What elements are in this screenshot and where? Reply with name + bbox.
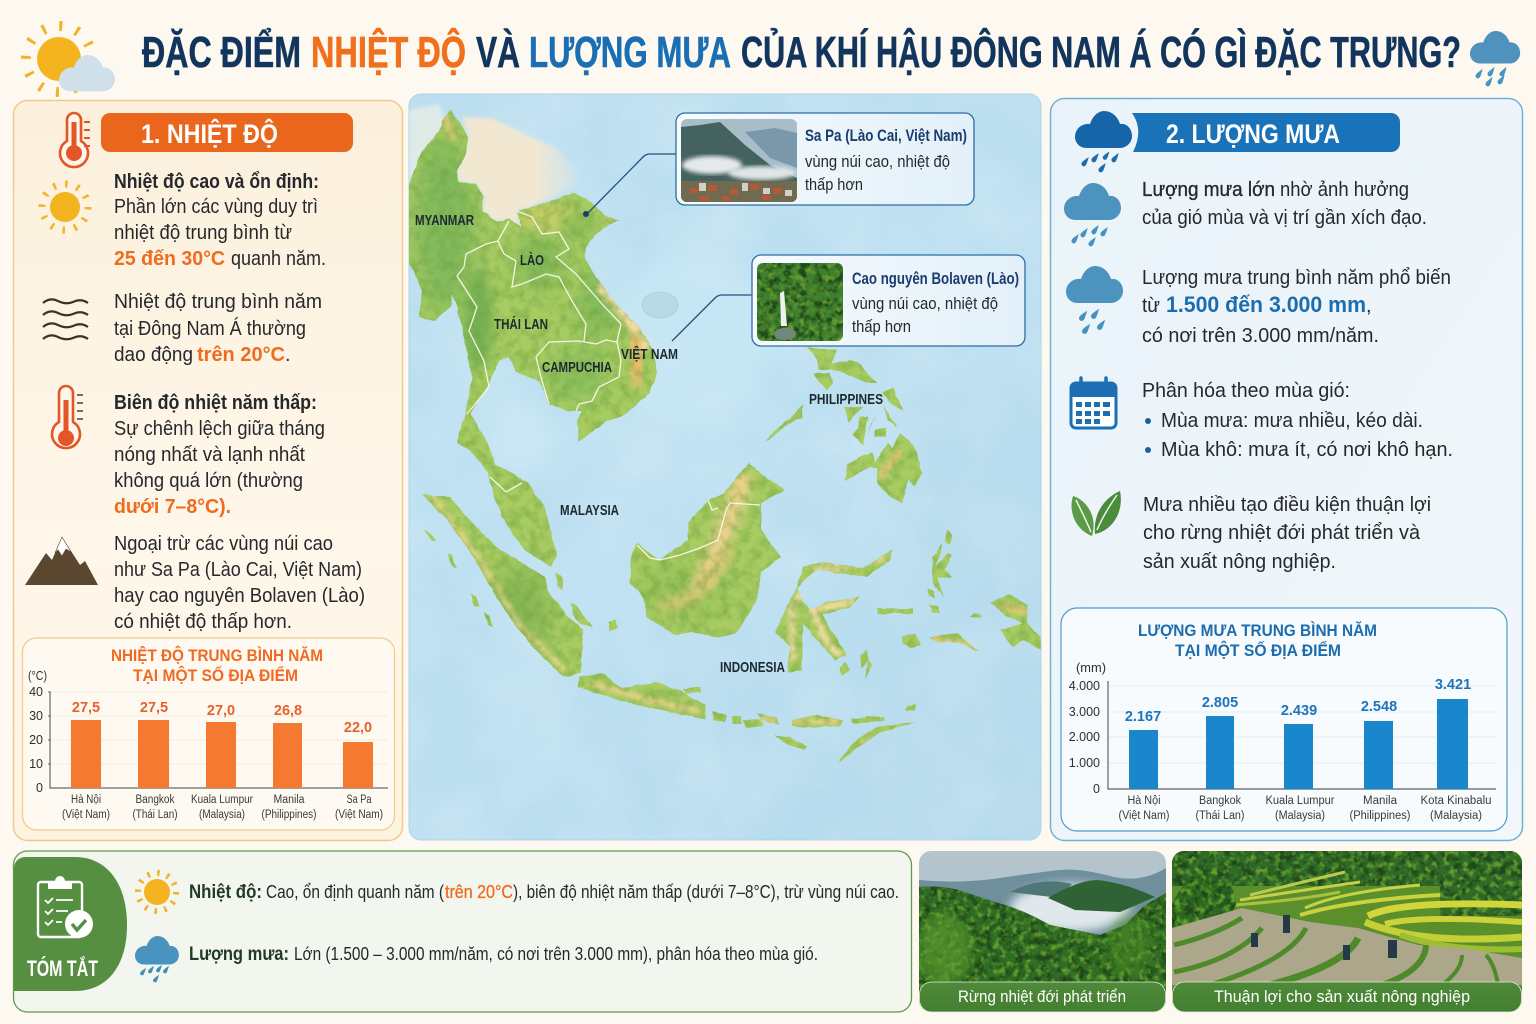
heading: 1. Nhiệt độ (101, 113, 353, 152)
text: high stable temperature (114, 171, 326, 270)
bar chart: temperature: (Malaysia) (199, 809, 245, 821)
bar chart: temperature (22, 638, 394, 830)
text: exception highlands: có nhiệt độ thấp hơn. (114, 611, 292, 633)
text: forests and agriculture: cho rừng nhiệt đới phát triển và (1143, 522, 1421, 544)
text: summary rainfall: Lượng mưa: (189, 944, 289, 965)
bar chart: rainfall: 2.548 (1361, 699, 1397, 715)
text: seasonal differentiation: Mùa mưa: mưa nhiều, kéo dài. (1161, 410, 1423, 432)
text: average temperature: trên 20°C (197, 344, 285, 366)
bar chart: temperature: 40 (29, 685, 43, 699)
text: annual rainfall (1142, 267, 1451, 347)
icon: rain cloud one (1064, 183, 1121, 247)
bar chart: temperature: (Thái Lan) (132, 809, 178, 821)
icon: calendar (1071, 378, 1116, 428)
photo: rice terraces (1172, 851, 1522, 1012)
text: exception highlands: hay cao nguyên Bolaven (Lào) (114, 585, 365, 607)
bar chart: temperature: Sa Pa (346, 794, 372, 806)
map: Hainan (642, 292, 678, 318)
text: forests and agriculture (1143, 494, 1431, 573)
heading: 2. Lượng mưa: 2. LƯỢNG MƯA (1166, 119, 1340, 149)
bar chart: rainfall: Kota Kinabalu (1420, 795, 1492, 807)
bar chart: temperature: 27,5 (72, 700, 100, 716)
text: heavy rain: nhờ ảnh hưởng (1280, 179, 1409, 201)
bar chart: temperature: TẠI MỘT SỐ ĐỊA ĐIỂM (133, 665, 298, 685)
text: exception highlands: Ngoại trừ các vùng núi cao (114, 533, 333, 555)
panel: rainfall (1050, 98, 1522, 840)
title (142, 26, 1461, 77)
heading: 2. Lượng mưa (1132, 113, 1400, 152)
text: annual rainfall: 1.500 đến 3.000 mm (1166, 292, 1366, 317)
bar chart: temperature: Bangkok (136, 794, 175, 806)
bar chart: temperature: Kuala Lumpur (191, 794, 253, 806)
icon: rain cloud top right (1470, 31, 1520, 87)
map: country labels: LÀO (520, 252, 544, 269)
map: country labels: CAMPUCHIA (542, 359, 612, 376)
text: summary rainfall: Lớn (1.500 – 3.000 mm/năm, có nơi trên 3.000 mm), phân hóa theo mùa gió. (294, 944, 818, 964)
caption: forest (920, 982, 1166, 1012)
text: low annual range (114, 392, 325, 518)
arrow: leader to Sa Pa (583, 154, 676, 217)
title: ĐẶC ĐIỂM (142, 26, 301, 77)
bar chart: rainfall: LƯỢNG MƯA TRUNG BÌNH NĂM (1138, 621, 1377, 640)
text: high stable temperature: nhiệt độ trung bình từ (114, 222, 292, 244)
bar chart: temperature: Hà Nội (71, 794, 101, 806)
text: low annual range: không quá lớn (thường (114, 470, 303, 492)
text: low annual range: nóng nhất và lạnh nhất (114, 444, 305, 466)
map: country labels (415, 212, 883, 676)
bar chart: temperature: (°C) (28, 669, 47, 683)
icon: checklist clipboard (38, 876, 93, 938)
icon: summary rain cloud (135, 936, 179, 983)
text: annual rainfall: , (1366, 295, 1372, 317)
bar chart: rainfall: 0 (1093, 782, 1100, 796)
bar chart: temperature: 26,8 (274, 703, 302, 719)
text: average temperature: Nhiệt độ trung bình năm (114, 291, 322, 313)
text: low annual range: dưới 7–8°C). (114, 496, 231, 518)
caption: agriculture (1172, 982, 1522, 1012)
text: average temperature (114, 291, 322, 366)
bar chart: temperature: Manila (274, 794, 305, 806)
text: Sa Pa note: thấp hơn (805, 175, 863, 194)
heading: 1. Nhiệt độ: 1. NHIỆT ĐỘ (141, 118, 278, 149)
text: average temperature: dao động (114, 344, 193, 366)
text: seasonal differentiation: Mùa khô: mưa ít, có nơi khô hạn. (1161, 439, 1453, 461)
bar chart: rainfall: (Malaysia) (1275, 810, 1325, 822)
bar chart: rainfall: 2.805 (1202, 695, 1238, 711)
text: annual rainfall: Lượng mưa trung bình năm phổ biến (1142, 267, 1451, 289)
caption: forest: Rừng nhiệt đới phát triển (958, 987, 1126, 1006)
arrow: leader to Bolaven (672, 295, 752, 341)
text: high stable temperature: 25 đến 30°C (114, 248, 225, 270)
bar chart: temperature: 10 (29, 757, 43, 771)
text: Bolaven note: vùng núi cao, nhiệt độ (852, 294, 998, 313)
text: annual rainfall: có nơi trên 3.000 mm/năm. (1142, 325, 1379, 347)
bar chart: temperature: (Việt Nam) (335, 809, 383, 821)
map: country labels: PHILIPPINES (809, 391, 883, 408)
icon: heat waves (43, 299, 88, 339)
text: low annual range: Biên độ nhiệt năm thấp: (114, 392, 317, 414)
icon: summary sun (138, 873, 176, 911)
bar chart: rainfall: 2.439 (1281, 703, 1317, 719)
bar chart: rainfall: (mm) (1076, 661, 1106, 675)
text: Bolaven note: thấp hơn (852, 317, 911, 336)
bar chart: rainfall: (Malaysia) (1430, 810, 1482, 822)
icon: sun (42, 184, 88, 230)
text: seasonal differentiation (1142, 380, 1453, 461)
bar chart: temperature: NHIỆT ĐỘ TRUNG BÌNH NĂM (111, 646, 323, 665)
icon: thermometer header (60, 113, 90, 167)
title: NHIỆT ĐỘ (311, 26, 466, 77)
icon: leaves (1072, 491, 1121, 536)
panel: temperature (14, 100, 402, 840)
map: China cream land (409, 104, 585, 227)
text: average temperature: . (285, 344, 291, 366)
text: exception highlands (114, 533, 365, 633)
map: country labels: MYANMAR (415, 212, 474, 229)
text: heavy rain: Lượng mưa lớn (1142, 179, 1275, 201)
photo: tropical forest (919, 851, 1166, 1012)
bar chart: rainfall: 3.421 (1435, 677, 1471, 693)
text: summary temperature: Cao, ổn định quanh năm ( (266, 882, 444, 902)
photo: Sa Pa mist (681, 119, 797, 202)
bar chart: rainfall: (Philippines) (1350, 810, 1411, 822)
text: forests and agriculture: sản xuất nông nghiệp. (1143, 551, 1336, 573)
bar chart: rainfall: (Thái Lan) (1196, 810, 1245, 822)
text: heavy rain (1142, 179, 1427, 229)
bar chart: rainfall: 1.000 (1069, 756, 1100, 770)
text: summary rainfall (189, 944, 818, 965)
text: low annual range: Sự chênh lệch giữa tháng (114, 418, 325, 440)
panel: map of Southeast Asia (400, 90, 1050, 840)
text: summary temperature: Nhiệt độ: (189, 882, 262, 903)
icon: thermometer (52, 386, 83, 448)
bar chart: rainfall: Kuala Lumpur (1266, 795, 1335, 807)
bar chart: rainfall: 3.000 (1069, 705, 1100, 719)
icon: sun and cloud (26, 26, 115, 92)
summary tab (14, 857, 127, 991)
text: Bolaven note (852, 269, 1019, 336)
text: high stable temperature: Nhiệt độ cao và ổn định: (114, 171, 319, 193)
text: high stable temperature: quanh năm. (231, 248, 326, 270)
callout: Bolaven (752, 255, 1025, 346)
text: annual rainfall: từ (1142, 295, 1160, 317)
bar chart: temperature: 27,5 (140, 700, 168, 716)
bar chart: temperature: 27,0 (207, 703, 235, 719)
bar chart: temperature: 22,0 (344, 720, 372, 736)
map: country labels: THÁI LAN (494, 316, 548, 333)
callout: Sa Pa (676, 113, 974, 205)
caption: agriculture: Thuận lợi cho sản xuất nông nghiệp (1214, 987, 1470, 1006)
bar chart: temperature: 30 (29, 709, 43, 723)
bar chart: rainfall: 4.000 (1069, 679, 1100, 693)
bar chart: rainfall: 2.000 (1069, 730, 1100, 744)
bar chart: rainfall: Manila (1363, 795, 1398, 807)
bar chart: temperature: (Philippines) (262, 809, 317, 821)
text: Bolaven note: Cao nguyên Bolaven (Lào) (852, 269, 1019, 288)
text: summary temperature (189, 882, 899, 903)
bar chart: temperature: 20 (29, 733, 43, 747)
bar chart: rainfall: TẠI MỘT SỐ ĐỊA ĐIỂM (1175, 640, 1341, 660)
text: summary temperature: ), biên độ nhiệt năm thấp (dưới 7–8°C), trừ vùng núi cao. (513, 882, 899, 902)
bar chart: rainfall: (Việt Nam) (1118, 810, 1170, 822)
text: high stable temperature: Phần lớn các vùng duy trì (114, 196, 318, 218)
icon: mountain (25, 537, 98, 585)
bar chart: rainfall: Bangkok (1199, 795, 1241, 807)
map: country labels: MALAYSIA (560, 502, 619, 519)
bar chart: rainfall: 2.167 (1125, 709, 1161, 725)
text: Sa Pa note (805, 126, 967, 194)
icon: header rain cloud (1075, 111, 1132, 173)
text: seasonal differentiation: Phân hóa theo mùa gió: (1142, 380, 1350, 402)
text: Sa Pa note: vùng núi cao, nhiệt độ (805, 152, 950, 171)
map: country labels: VIỆT NAM (621, 345, 678, 363)
text: Sa Pa note: Sa Pa (Lào Cai, Việt Nam) (805, 126, 967, 145)
photo: Bolaven waterfall (757, 263, 843, 341)
bar chart: rainfall: Hà Nội (1128, 795, 1160, 807)
text: average temperature: tại Đông Nam Á thường (114, 317, 306, 340)
title: LƯỢNG MƯA (529, 28, 731, 77)
icon: rain cloud two (1066, 266, 1123, 335)
map: land masses (409, 110, 1041, 763)
text: heavy rain: của gió mùa và vị trí gần xích đạo. (1142, 207, 1427, 229)
text: exception highlands: như Sa Pa (Lào Cai, Việt Nam) (114, 559, 362, 581)
map: country borders (457, 211, 760, 560)
text: summary temperature: trên 20°C (445, 882, 513, 902)
summary tab: TÓM TẮT (27, 956, 98, 981)
title: VÀ (476, 27, 520, 77)
text: forests and agriculture: Mưa nhiều tạo điều kiện thuận lợi (1143, 494, 1431, 516)
map: country labels: INDONESIA (720, 659, 785, 676)
bar chart: temperature: 0 (36, 781, 43, 795)
panel: summary (14, 851, 912, 1012)
bar chart: rainfall (1061, 608, 1507, 831)
bar chart: temperature: (Việt Nam) (62, 809, 110, 821)
